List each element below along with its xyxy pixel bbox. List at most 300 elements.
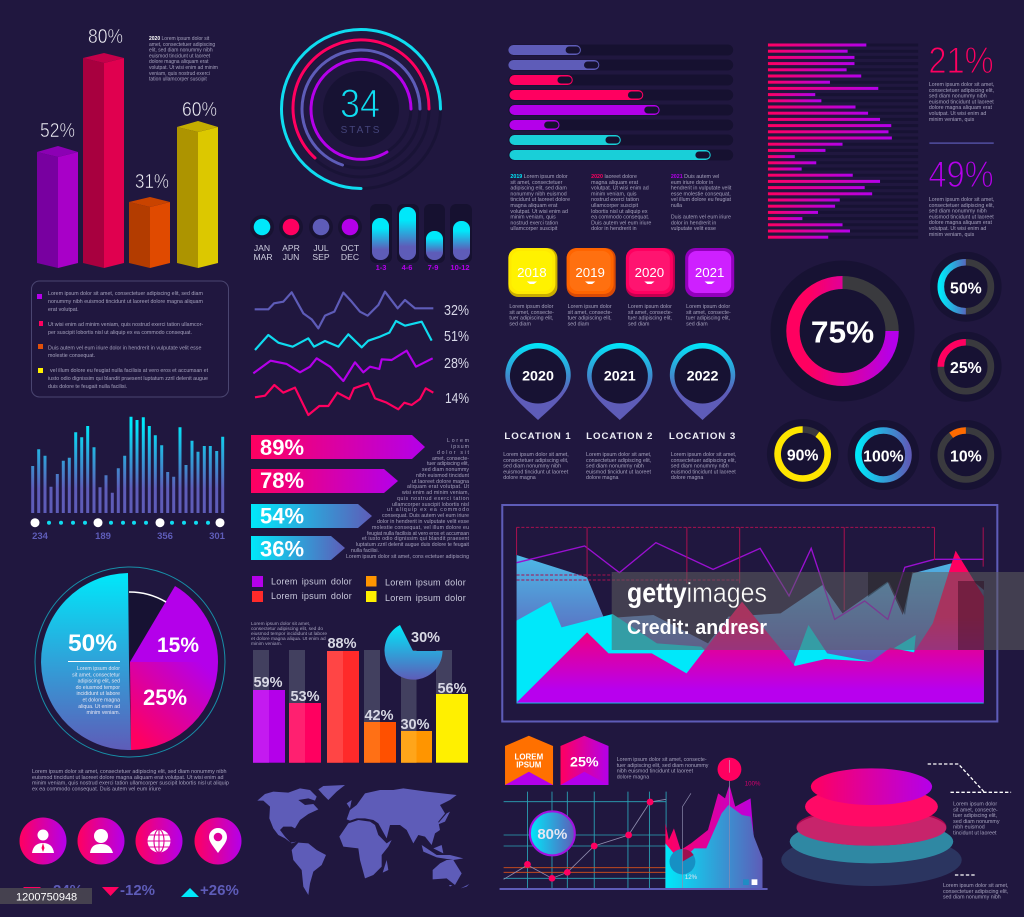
horizontal stripe chart [768, 44, 918, 239]
note above bars: minim veniam. [251, 641, 282, 647]
arrow banners [251, 435, 425, 562]
banner 54% [251, 504, 372, 528]
column chart axis labels: 301 [209, 531, 226, 542]
legend paragraphs: Lorem ipsum dolor sit amet, consectetuer adipiscing elit, sed diam [48, 291, 203, 297]
radial stats gauge [281, 30, 440, 188]
location captions: dolore magna [503, 475, 536, 481]
legend labels: Lorem ipsum dolor [385, 578, 466, 588]
note above bars: consectetur adipiscing elit, sed do [251, 626, 323, 632]
location captions: consectetuer adipiscing elit, [586, 458, 651, 464]
text block: 2020 note: elit, sed diam nonummy nibh [149, 48, 213, 54]
bar 30% [401, 731, 432, 763]
quarter labels: MAR [253, 252, 273, 262]
text block: 2020 note: Lorem ipsum dolor sit [160, 36, 210, 42]
note above bars: Lorem ipsum dolor sit amet, [251, 621, 310, 627]
grid line chart [504, 792, 666, 888]
location captions: Lorem ipsum dolor sit amet, [503, 452, 569, 458]
text column 2019: volutpat. Ut wisi enim ad [510, 209, 568, 215]
banner 78% [251, 468, 398, 493]
quarter labels: JUN [283, 252, 299, 262]
text column 2021: hendrerit in vulputate velit [671, 186, 732, 192]
location headings: LOCATION 1 [504, 431, 572, 442]
pie value 15%: 15% [157, 634, 199, 657]
disc note upper: Lorem ipsum dolor [953, 802, 997, 807]
button captions: Lorem ipsum dolor [509, 304, 554, 310]
text column 2021: vulputate velit esse [671, 226, 716, 232]
stepped paragraph: molestie consequat, vel illum dolore eu [372, 525, 469, 531]
button captions: tuer adipiscing elit, [509, 316, 553, 322]
gauge value: 34 [340, 82, 380, 126]
bar values: 30% [400, 717, 430, 733]
line chart values [444, 302, 469, 407]
location headings: LOCATION 2 [586, 431, 653, 442]
note beside tags: nibh euismod tincidunt ut laoreet [617, 769, 694, 775]
banner 89%: 89% [260, 435, 304, 460]
label 12%: 12% [685, 875, 698, 881]
text column 2020: ullamcorper suscipit [591, 203, 639, 209]
note above bars: eiusmod tempor incididunt ut labore [251, 631, 327, 637]
text column 2020: laoreet dolore [603, 174, 637, 180]
bar values: 42% [364, 708, 394, 724]
text column 2020: volutpat. Ut wisi enim ad [591, 186, 649, 192]
button captions: tuer adipiscing elit, [568, 316, 612, 322]
text column 2020: nostrud exerci tation [591, 197, 639, 203]
text column 2021: nulla [671, 203, 682, 209]
pill labels: 7-9 [428, 263, 438, 272]
location captions: consectetuer adipiscing elit, [671, 458, 736, 464]
bar values [253, 636, 467, 733]
stat 49% text: sed diam nonummy nibh [929, 209, 987, 215]
legend paragraphs: iusto odio dignissim qui blandit praesent luptatum zzril delenit augue [48, 376, 208, 382]
location headings [504, 431, 736, 442]
legend paragraphs: molestie consequat. [48, 353, 95, 359]
location captions: sed diam nonummy nibh [671, 464, 729, 470]
paragraph below pie: ex ea commodo consequat. Duis autem vel eum iriure [32, 786, 161, 792]
pie note: do eiusmod tempor [76, 685, 120, 691]
legend paragraphs: per suscipit lobortis nisl ut aliquip ex ea commodo consequat. [48, 330, 192, 336]
text column 2020: minim veniam, quis [591, 191, 637, 197]
stepped paragraph: et iusto odio dignissim qui blandit praesent [362, 536, 470, 542]
donut 10% [930, 420, 1002, 490]
location captions: Lorem ipsum dolor sit amet, [671, 452, 736, 458]
text block: 2020 note: dolore magna aliquam erat [149, 59, 209, 65]
location pin 2022 [670, 343, 735, 420]
text column 2021: dolor in hendrerit in [671, 220, 716, 226]
location captions: dolore magna [671, 475, 703, 481]
stepped paragraph [346, 438, 470, 560]
stepped paragraph: quis nostrud exerci tation [397, 496, 469, 502]
trend: +26%: +26% [200, 882, 239, 899]
text column 2020: lobortis nisl ut aliquip ex [591, 209, 648, 215]
button captions: sed diam [509, 321, 532, 327]
location captions: dolore magna [586, 475, 619, 481]
text block: 2020 note: veniam, quis nostrud exerci [149, 71, 210, 77]
button captions: sit amet, consecte- [509, 310, 554, 316]
watermark band [612, 572, 1024, 650]
disc note upper: nibh euismod [953, 825, 985, 831]
donut 10%: 10% [950, 449, 982, 465]
text column 2019: 2019 [510, 174, 522, 180]
bar 3 [509, 75, 573, 85]
framed area chart [502, 505, 997, 722]
bar 7 [509, 135, 621, 145]
text column 2019: tincidunt ut laoreet dolore [510, 197, 570, 203]
label 31%: 31% [135, 171, 169, 193]
note beside tags: tuer adipiscing elit, sed diam nonummy [617, 763, 709, 769]
trend: -24% [23, 882, 83, 899]
panel: legend text box [32, 281, 228, 397]
year buttons [508, 248, 734, 297]
button captions: sed diam [568, 321, 590, 327]
banner 89% [251, 435, 425, 460]
stat 49%: 49% [928, 153, 994, 195]
banner 36% [251, 536, 345, 562]
location captions: consectetuer adipiscing elit, [503, 458, 568, 464]
banner 54%: 54% [260, 504, 304, 528]
legend paragraphs: erat volutpat. [48, 307, 79, 313]
stat 49% text: dolore magna aliquam erat [929, 220, 993, 226]
pie note: adipiscing elit, sed [78, 679, 120, 685]
text column 2019: ullamcorper suscipit [510, 226, 558, 232]
text column 2020: Duis autem vel eum iriure [591, 220, 651, 226]
text column 2020: ea commodo consequat. [591, 215, 649, 221]
badge 80% [530, 811, 575, 855]
bar values: 59% [253, 675, 283, 691]
icon: person [78, 818, 124, 864]
text block: 2020 note: amet, consectetuer adipiscing [149, 42, 215, 48]
stepped paragraph: ipsum [451, 444, 469, 450]
icon: businessman [20, 818, 66, 864]
text column 2019: nonummy nibh euismod [510, 191, 567, 197]
pie note: Lorem ipsum dolor [77, 666, 120, 672]
stepped paragraph: Lorem ipsum dolor sit amet, cons ectetuer adipiscing [346, 554, 469, 560]
label 60%: 60% [182, 99, 217, 121]
3D bar chart [37, 26, 218, 268]
paragraph below pie: euismod tincidunt ut laoreet dolore magna aliquam erat volutpat. Ut wisi enim ad [32, 775, 223, 781]
text column 2021: Duis autem vel [683, 174, 719, 180]
location pin 2020 [505, 343, 571, 420]
pie note: aliqua. Ut enim ad [78, 704, 120, 710]
legend labels: Lorem ipsum dolor [271, 591, 352, 601]
stat 21% text: consectetuer adipiscing elit, [929, 88, 994, 94]
location captions: euismod tincidunt ut laoreet [671, 469, 736, 475]
button 2020: 2020 [635, 265, 664, 280]
line chart values: 32% [444, 302, 469, 319]
text column 2020: dolor in hendrerit in [591, 226, 637, 232]
button captions: tuer adipiscing elit, [686, 316, 730, 322]
button captions [509, 304, 731, 327]
bar: 60% [177, 121, 218, 268]
trend: -12%: -12% [120, 882, 155, 899]
stepped paragraph: wisi enim ad minim veniam, [402, 490, 469, 496]
column chart axis labels: 234 [32, 531, 49, 542]
pie note: incididunt ut labore [76, 691, 120, 697]
disc note upper: sed diam nonummy [953, 819, 1000, 825]
icon: location pin [194, 818, 242, 864]
image id stamp [0, 888, 92, 904]
bar: 80% [83, 53, 124, 268]
quarter labels [253, 243, 360, 262]
stat 21%: 21% [928, 39, 994, 81]
button captions: sit amet, consecte- [628, 310, 673, 316]
stepped paragraph: Lorem [447, 438, 469, 444]
icon: globe [136, 818, 182, 864]
button captions: sed diam [628, 321, 650, 327]
quarter labels: JAN [254, 243, 270, 253]
button 2021 [685, 248, 734, 297]
text block: 2020 note: tation ullamcorper suscipit [149, 77, 207, 83]
text column 2019: sit amet, consectetuer [510, 180, 563, 186]
button 2020 [626, 248, 675, 297]
text column 2020: magna aliquam erat [591, 180, 639, 186]
button 2019: 2019 [575, 265, 605, 280]
paragraph below pie: minim veniam, quis nostrud exerci tation ullamcorper suscipit lobortis nisl ut aliquip [32, 781, 229, 787]
tag: 25% [561, 736, 609, 785]
location pin 2021: 2021 [604, 368, 636, 383]
donut 50%: 50% [950, 281, 982, 297]
legend labels: Lorem ipsum dolor [271, 576, 352, 586]
line chart [253, 292, 469, 415]
location captions: sed diam nonummy nibh [586, 464, 644, 470]
legend paragraphs: nonummy nibh euismod tincidunt ut laoreet dolore magna aliquam [48, 299, 203, 305]
watermark credit: Credit: andresr [627, 617, 767, 639]
stepped paragraph: ullamcorper suscipit lobortis nisl [392, 502, 469, 508]
donut 90%: 90% [787, 448, 819, 464]
note beside tags: dolore magna [617, 774, 649, 780]
bar 1 [508, 45, 581, 55]
disc note upper: tuer adipiscing elit, [953, 813, 997, 819]
pie note: sit amet, consectetur [72, 672, 120, 678]
bar: 31% [129, 197, 170, 268]
pie value 50%: 50% [68, 630, 117, 657]
badge 80%: 80% [537, 827, 567, 843]
legend paragraphs: vel illum dolore eu feugiat nulla facilisis at vero eros et accumsan et [50, 368, 209, 374]
text column 2019: minim veniam, quis [510, 215, 556, 221]
bar values: 88% [327, 636, 357, 652]
bar 53% [289, 703, 321, 763]
note above bars: et dolore magna aliqua. Ut enim ad [251, 636, 326, 642]
line chart values: 51% [444, 328, 469, 345]
text column 2021: vel illum dolore eu feugiat [671, 197, 732, 203]
location pin 2022: 2022 [687, 368, 719, 383]
small pie callout 30% [385, 625, 442, 680]
quarter labels: OCT [341, 243, 360, 253]
thin column chart [30, 417, 226, 542]
text column 2019: Lorem ipsum dolor [522, 174, 568, 180]
bar 88% [327, 651, 359, 763]
progress bars [508, 44, 733, 160]
note beside tags: Lorem ipsum dolor sit amet, consecte- [617, 757, 707, 763]
label 80%: 80% [88, 26, 123, 48]
bar 59% [253, 690, 285, 763]
stepped paragraph: ut aliquip ex ea commodo [387, 507, 469, 513]
stepped paragraph: luptatum zzril delenit augue duis dolore te feugait [356, 542, 470, 548]
stat 49% text: Lorem ipsum dolor sit amet, [929, 197, 994, 203]
button captions: tuer adipiscing elit, [628, 316, 672, 322]
tag: lorem ipsum: LOREM [514, 753, 544, 761]
bar 4 [509, 90, 643, 100]
button captions: Lorem ipsum dolor [628, 304, 672, 310]
donut 90% [767, 419, 838, 489]
text block: 2020 note: 2020 [149, 36, 160, 42]
legend paragraphs: duis dolore te feugait nulla facilisi. [48, 384, 127, 390]
trend: +26% [181, 882, 239, 899]
stepped paragraph: sed diam nonummy [422, 467, 469, 473]
quarter dots [250, 215, 362, 262]
text column 2019: magna aliquam erat [510, 203, 558, 209]
pill bar chart [370, 204, 472, 272]
location captions: euismod tincidunt ut laoreet [586, 469, 651, 475]
location pin 2020: 2020 [522, 368, 554, 383]
gauge caption: STATS [341, 125, 381, 136]
column chart axis labels [32, 531, 226, 542]
donut 100% [848, 420, 919, 490]
stat 49% text: volutpat. Ut wisi enim ad [929, 226, 986, 232]
stat 49% text: minim veniam, quis [929, 232, 975, 238]
pill labels: 4-6 [402, 263, 412, 272]
stat 21% text: sed diam nonummy nibh [929, 94, 987, 100]
disc note upper: sit amet, consecte- [953, 807, 998, 813]
label 52%: 52% [40, 120, 75, 142]
text column 2021: Duis autem vel eum iriure [671, 215, 731, 221]
line chart values: 14% [445, 390, 469, 407]
disc note upper: tincidunt ut laoreet [953, 831, 997, 836]
pie chart [35, 567, 225, 757]
bar 8 [509, 150, 711, 160]
tag: 25%: 25% [570, 754, 599, 769]
donut 25%: 25% [950, 360, 982, 377]
column chart axis labels: 356 [157, 531, 173, 542]
stepped paragraph: tuer adipiscing elit, [427, 461, 469, 467]
location pin 2021 [587, 343, 652, 420]
button 2019 [567, 248, 616, 297]
line chart values: 28% [444, 355, 469, 372]
button captions: Lorem ipsum dolor [686, 304, 730, 310]
location captions: euismod tincidunt ut laoreet [503, 469, 569, 475]
disc note lower: consectetuer adipiscing elit, [943, 889, 1008, 895]
tag: lorem ipsum [505, 736, 553, 785]
stat 49% text: consectetuer adipiscing elit, [929, 203, 994, 209]
watermark brand: gettyimages [627, 577, 767, 608]
text column 2019: adipiscing elit, sed diam [510, 186, 567, 192]
text column 2021: esse molestie consequat, [671, 191, 731, 197]
label 100%: 100% [745, 782, 761, 788]
bar values: 56% [437, 681, 467, 697]
stat 21% text: volutpat. Ut wisi enim ad [929, 111, 986, 117]
bar values: 53% [290, 689, 320, 705]
stat 21% text: minim veniam, quis [929, 117, 975, 123]
text column 2021: 2021 [671, 174, 683, 180]
disc note lower: Lorem ipsum dolor sit amet, [943, 883, 1008, 889]
stepped paragraph: dolor in hendrerit in vulputate velit esse [377, 519, 469, 525]
stepped paragraph: consequat. Duis autem vel eum iriure [382, 513, 469, 519]
text column 2019: nostrud exerci tation [510, 220, 558, 226]
disc note lower: sed diam nonummy nibh [943, 895, 1001, 901]
quarter labels: APR [282, 243, 300, 253]
stat 49% text: euismod tincidunt ut laoreet [929, 214, 994, 220]
tag: lorem ipsum: IPSUM [516, 761, 542, 769]
button 2018 [508, 248, 557, 297]
location captions [503, 452, 736, 481]
trend: -24%: -24% [48, 882, 83, 899]
stepped paragraph: aliquam erat volutpat. Ut [407, 484, 470, 490]
donut 50% [930, 252, 1002, 322]
stat 21% text: euismod tincidunt ut laoreet [929, 99, 994, 105]
donut 75%: 75% [811, 315, 874, 349]
stacked discs [781, 764, 1011, 886]
bar 56% [436, 694, 468, 763]
colour legend [252, 576, 466, 603]
paragraph below pie: Lorem ipsum dolor sit amet, consectetuer adipiscing elit, sed diam nonummy nibh [32, 769, 226, 775]
donut 100%: 100% [863, 449, 904, 465]
button captions: sit amet, consecte- [686, 310, 731, 316]
small pie callout 30%: 30% [411, 630, 440, 646]
pie note: et dolore magna [82, 698, 120, 704]
pill labels: 10-12 [450, 263, 470, 272]
button captions: Lorem ipsum dolor [568, 304, 612, 310]
legend labels [271, 576, 466, 603]
text column 2021: eum iriure dolor in [671, 180, 713, 186]
bar: 52% [37, 146, 78, 268]
image id stamp: 1200750948 [16, 892, 77, 904]
right half of the page [500, 39, 1011, 901]
bar 42% [364, 722, 396, 763]
location captions: Lorem ipsum dolor sit amet, [586, 452, 652, 458]
world map [257, 785, 469, 895]
flat bar chart [253, 625, 468, 763]
mountain chart [500, 758, 768, 890]
legend paragraphs: Ut wisi enim ad minim veniam, quis nostrud exerci tation ullamcor- [48, 322, 203, 328]
banner 36%: 36% [260, 536, 304, 562]
bar 6 [509, 120, 559, 130]
button captions: sed diam [686, 321, 708, 327]
trend: -12% [102, 882, 155, 899]
location captions: sed diam nonummy nibh [503, 464, 561, 470]
button 2018: 2018 [517, 265, 547, 280]
donut 75% [770, 260, 915, 402]
text block: 2020 note: euismod tincidunt ut laoreet [149, 53, 211, 59]
pie value 25%: 25% [143, 685, 187, 710]
text block: 2020 note: volutpat. Ut wisi enim ad minim [149, 65, 218, 71]
banner 78%: 78% [260, 468, 304, 493]
text column 2020: 2020 [591, 174, 603, 180]
column chart axis labels: 189 [95, 531, 111, 542]
pill labels [376, 263, 470, 272]
stat 21% text: dolore magna aliquam erat [929, 105, 993, 111]
stepped paragraph: nibh euismod tincidunt [416, 473, 470, 479]
location headings: LOCATION 3 [669, 431, 736, 442]
pill labels: 1-3 [376, 263, 386, 272]
peak marker [718, 758, 741, 781]
quarter labels: SEP [312, 252, 330, 262]
stepped paragraph: ut laoreet dolore magna [412, 479, 469, 485]
pie note: minim veniam. [87, 710, 120, 716]
bar 2 [508, 60, 599, 70]
stepped paragraph: dolor sit [437, 450, 470, 456]
donut 25% [930, 332, 1002, 402]
stepped paragraph: feugiat nulla facilisis at vero eros et accumsan [367, 531, 469, 537]
legend paragraphs: Duis autem vel eum iriure dolor in hendrerit in vulputate velit esse [48, 346, 201, 352]
legend labels: Lorem ipsum dolor [385, 593, 466, 603]
quarter labels: JUL [313, 243, 329, 253]
bar 5 [509, 105, 660, 115]
stepped paragraph: amet, consecte- [432, 456, 469, 462]
stat 21% text: Lorem ipsum dolor sit amet, [929, 82, 994, 88]
quarter labels: DEC [341, 252, 359, 262]
stepped paragraph: nulla facilisi. [351, 548, 379, 554]
button 2021: 2021 [695, 265, 724, 280]
button captions: sit amet, consecte- [568, 310, 612, 316]
